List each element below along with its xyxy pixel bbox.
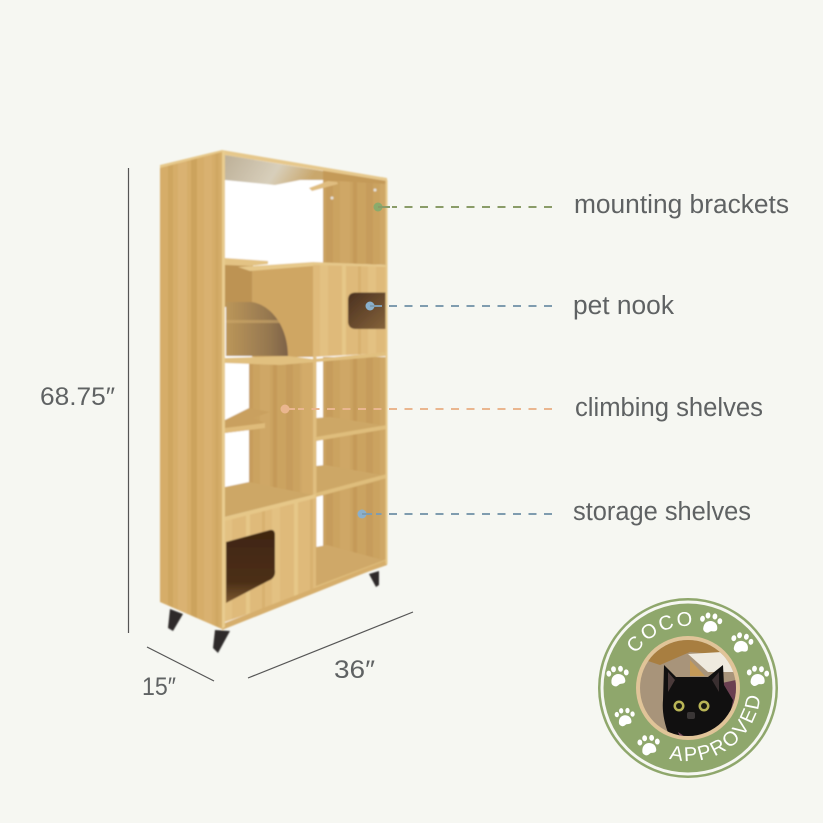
badge text: APPROVED: APPROVED [669,696,760,762]
callout: pet nook [366,292,674,320]
lower back panels [323,357,387,563]
lower left shelf [225,482,313,517]
nook top shelves [225,258,268,266]
right column shelf 1 [316,417,387,441]
dimension: width [248,612,413,684]
ceiling underside [225,155,323,185]
nook rear and arch [225,265,253,307]
climbing shelf left [225,408,270,433]
cabinet door [225,495,316,622]
callout: climbing shelves [280,394,763,422]
callout: storage shelves [358,498,751,526]
right column shelf 2 [316,465,387,497]
badge paws [698,612,723,635]
bottom storage shelf [316,545,387,590]
bottom edge [222,560,387,630]
badge text: COCO: COCO [628,612,692,651]
callout: storage shelves: storage shelves [573,498,751,526]
dimension: depth: 15″ [142,673,176,701]
pet nook door [313,265,387,357]
pet nook hole [348,292,387,329]
upper right back panel [323,170,387,265]
small upper perch [309,181,338,191]
vertical divider edge [313,357,316,590]
legs [168,571,379,653]
callout: pet nook: pet nook [573,292,674,320]
right edge [386,180,388,564]
shelving unit [160,150,388,653]
callout: mounting brackets [374,191,789,219]
shelf below nook [225,352,387,365]
dimension: depth [142,647,214,701]
badge: Coco approved [598,598,778,778]
top edge [222,150,387,181]
white openings [225,155,387,625]
left side panel [160,151,222,629]
cat photo [640,640,736,736]
dimension: width: 36″ [334,656,375,684]
callout: climbing shelves: climbing shelves [575,394,763,422]
callout: mounting brackets: mounting brackets [574,191,789,219]
left panel front edge [222,150,225,629]
cabinet hole [226,530,275,603]
dimension: height: 68.75″ [40,383,115,411]
